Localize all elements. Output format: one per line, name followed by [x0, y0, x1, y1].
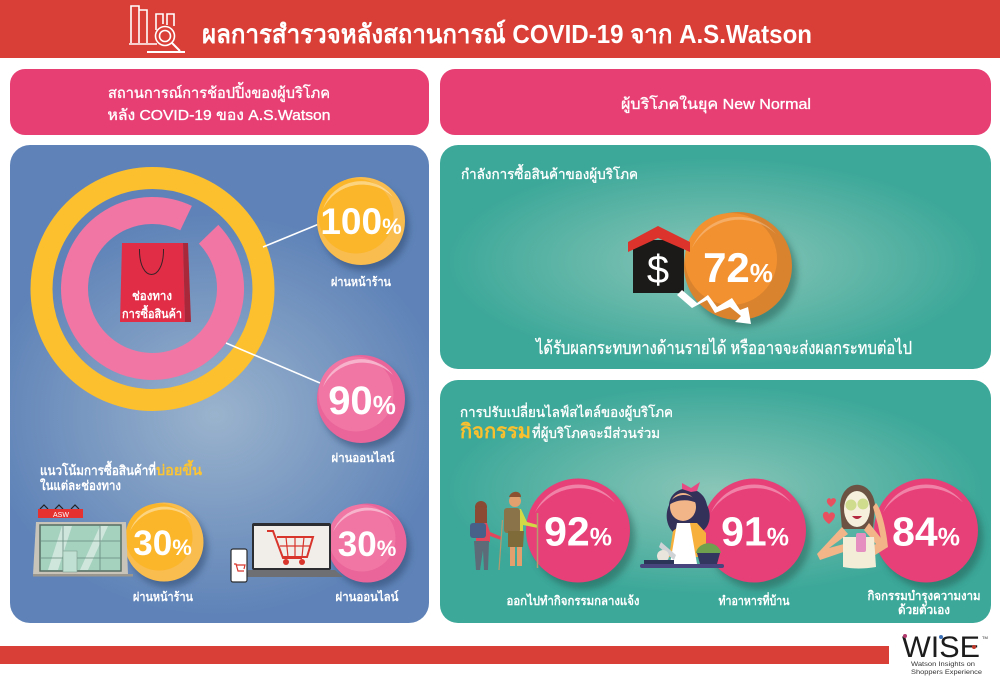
- heading: right section: [440, 69, 991, 135]
- label: online: ผ่านออนไลน์: [332, 450, 395, 465]
- stat bubble: 92%: [526, 478, 635, 590]
- label: self-care: ด้วยตัวเอง: [898, 603, 950, 617]
- icon: shopping bag: [120, 243, 191, 322]
- stat bubble: 72%: 72%: [703, 244, 773, 291]
- footer bar: [0, 646, 889, 664]
- stat bubble: 92%: 92%: [544, 508, 612, 554]
- icon: storefront: [33, 505, 133, 576]
- logo: WISE: [902, 631, 988, 676]
- label: in-store: ผ่านหน้าร้าน: [331, 275, 392, 289]
- illustration: hikers: [470, 492, 538, 570]
- text: income impact: ได้รับผลกระทบทางด้านรายได้ หรืออาจจะส่งผลกระทบต่อไป: [534, 337, 912, 358]
- stat bubble: online 90%: 90%: [328, 379, 396, 423]
- stat bubble: in-store 100%: [317, 177, 409, 271]
- logo: WISE: Shoppers Experience: [911, 670, 983, 676]
- panel: shopping channels: [10, 145, 429, 623]
- stat bubble: 84%: [874, 478, 983, 590]
- heading: lifestyle: ที่ผู้บริโภคจะมีส่วนร่วม: [532, 424, 660, 442]
- donut chart: channels: [42, 178, 264, 400]
- heading: left section: สถานการณ์การช้อปปิ้งของผู้บริโภค: [108, 82, 330, 102]
- icon: storefront: ASW: [53, 512, 69, 519]
- icon: house with dollar: $: [647, 248, 669, 292]
- label: self-care: [867, 589, 980, 617]
- stat bubble: 91%: [702, 478, 811, 590]
- stat bubble: in-store 100%: 100%: [320, 201, 402, 242]
- heading: lifestyle: การปรับเปลี่ยนไลฟ์สไตล์ของผู้บริโภค: [460, 403, 673, 421]
- label: online trend: ผ่านออนไลน์: [336, 589, 399, 604]
- heading: lifestyle: กิจกรรม: [460, 421, 531, 443]
- icon: house with dollar: [628, 226, 690, 293]
- logo: WISE: WISE: [902, 631, 980, 664]
- text: purchase trend: [40, 459, 202, 493]
- text: purchase trend: ในแต่ละช่องทาง: [40, 477, 121, 493]
- leader line: online: [226, 343, 320, 383]
- label: cooking: ทำอาหารที่บ้าน: [718, 592, 790, 608]
- text: purchase trend: แนวโน้มการซื้อสินค้าที่: [40, 460, 156, 478]
- icon: shopping bag: ช่องทาง: [132, 289, 172, 303]
- illustration: woman with face mask: [817, 485, 888, 568]
- logo: WISE: TM: [982, 635, 988, 640]
- stat bubble: in-store 30%: 30%: [133, 524, 192, 563]
- heading: left section: [10, 69, 429, 135]
- stat bubble: online 90%: [317, 355, 409, 449]
- stat bubble: in-store 30%: [124, 502, 208, 588]
- heading: lifestyle: [460, 403, 673, 443]
- icon: shopping bag: การซื้อสินค้า: [122, 304, 182, 321]
- label: self-care: กิจกรรมบำรุงความงาม: [867, 589, 980, 604]
- text: purchase trend: บ่อยขึ้น: [156, 459, 202, 478]
- icon: laptop and phone with cart: [231, 523, 343, 582]
- stat bubble: 72%: [684, 212, 797, 327]
- heading: purchasing power: กำลังการซื้อสินค้าของผู้บริโภค: [461, 164, 638, 183]
- label: outdoor: ออกไปทำกิจกรรมกลางแจ้ง: [506, 593, 640, 608]
- illustration: woman cooking: [640, 482, 724, 568]
- leader line: in-store: [263, 224, 319, 247]
- stat bubble: 91%: 91%: [721, 508, 789, 554]
- stat bubble: online 30%: 30%: [338, 525, 396, 564]
- panel: purchasing power: [440, 145, 991, 369]
- heading: left section: หลัง COVID-19 ของ A.S.Watson: [108, 107, 330, 124]
- heading: right section: ผู้บริโภคในยุค New Normal: [621, 95, 811, 114]
- arrow: falling income: [677, 290, 751, 324]
- header banner: [0, 0, 1000, 58]
- title: ผลการสำรวจหลังสถานการณ์ COVID-19 จาก A.S.Watson: [202, 19, 812, 49]
- stat bubble: online 30%: [328, 504, 410, 588]
- panel: lifestyle: [440, 380, 991, 623]
- stat bubble: 84%: 84%: [892, 508, 960, 554]
- logo: WISE: Watson Insights on: [911, 662, 975, 668]
- icon: bar chart with magnifier: [129, 6, 185, 52]
- label: in-store trend: ผ่านหน้าร้าน: [133, 590, 194, 604]
